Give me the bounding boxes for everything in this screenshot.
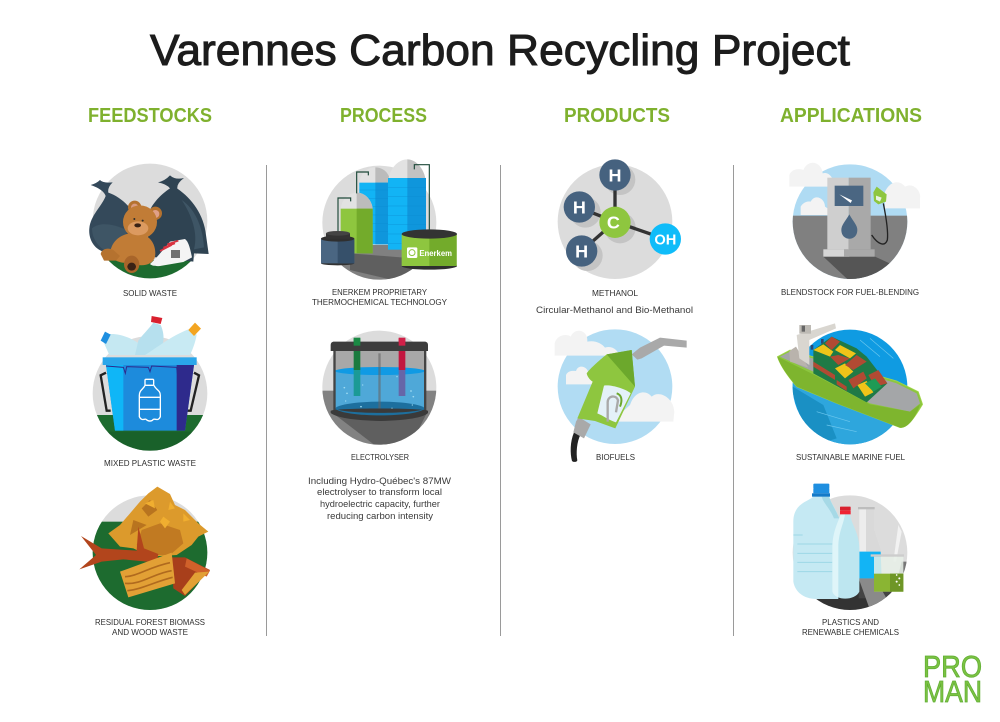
label: residual forest biomass and wood waste: AND WOOD WASTE	[112, 628, 189, 637]
logo: proman: MAN	[923, 674, 982, 709]
label: mixed plastic waste: MIXED PLASTIC WASTE	[104, 459, 197, 468]
icon: methanol molecule: H	[575, 241, 588, 261]
icon: enerkem technology: Enerkem	[419, 249, 452, 258]
title: Varennes Carbon Recycling Project	[150, 26, 850, 75]
icon: methanol molecule: OH	[654, 233, 676, 249]
label: biofuels: BIOFUELS	[596, 453, 636, 462]
icon: fuel pump	[789, 163, 920, 282]
label: residual forest biomass and wood waste	[95, 618, 206, 637]
heading: applications: APPLICATIONS	[780, 105, 922, 127]
icon: enerkem technology	[320, 159, 457, 282]
label: plastics and renewable chemicals: RENEWABLE CHEMICALS	[802, 628, 900, 637]
icon: marine ship	[777, 323, 923, 447]
text block: electrolyser description: hydroelectric capacity, further	[320, 499, 440, 509]
label: solid waste: SOLID WASTE	[123, 289, 178, 298]
label: residual forest biomass and wood waste: RESIDUAL FOREST BIOMASS	[95, 618, 206, 627]
text block: electrolyser description	[308, 476, 452, 521]
icon: plastics and chemicals	[793, 484, 908, 612]
text block: electrolyser description: electrolyser to transform local	[317, 487, 442, 497]
icon: mixed plastic waste	[90, 316, 210, 452]
label: plastics and renewable chemicals	[802, 618, 900, 637]
heading: products: PRODUCTS	[564, 105, 670, 127]
logo: proman	[923, 649, 982, 709]
label: blendstock for fuel-blending: BLENDSTOCK FOR FUEL-BLENDING	[781, 288, 919, 297]
icon: biofuels nozzle	[555, 329, 687, 462]
icon: electrolyser	[320, 331, 440, 447]
text block: electrolyser description: reducing carbon intensity	[327, 511, 434, 521]
text block: electrolyser description: Including Hydro-Québec's 87MW	[308, 476, 452, 486]
label: plastics and renewable chemicals: PLASTICS AND	[822, 618, 879, 627]
heading: process: PROCESS	[340, 105, 427, 127]
icon: methanol molecule: C	[607, 213, 620, 233]
label: enerkem proprietary technology: THERMOCHEMICAL TECHNOLOGY	[312, 298, 448, 307]
label: sustainable marine fuel: SUSTAINABLE MARINE FUEL	[796, 453, 905, 462]
logo: proman: PRO	[923, 649, 982, 684]
icon: methanol molecule: H	[573, 197, 586, 217]
heading: feedstocks: FEEDSTOCKS	[88, 105, 212, 127]
icon: residual forest biomass	[79, 487, 210, 612]
text block: methanol description: Circular-Methanol and Bio-Methanol	[536, 305, 693, 316]
label: enerkem proprietary technology: ENERKEM PROPRIETARY	[332, 288, 428, 297]
label: methanol: METHANOL	[592, 289, 638, 298]
icon: methanol molecule: H	[608, 165, 621, 185]
label: electrolyser: ELECTROLYSER	[351, 453, 409, 462]
icon: methanol molecule	[558, 159, 681, 279]
label: enerkem proprietary technology	[312, 288, 448, 307]
icon: solid waste	[89, 164, 210, 280]
